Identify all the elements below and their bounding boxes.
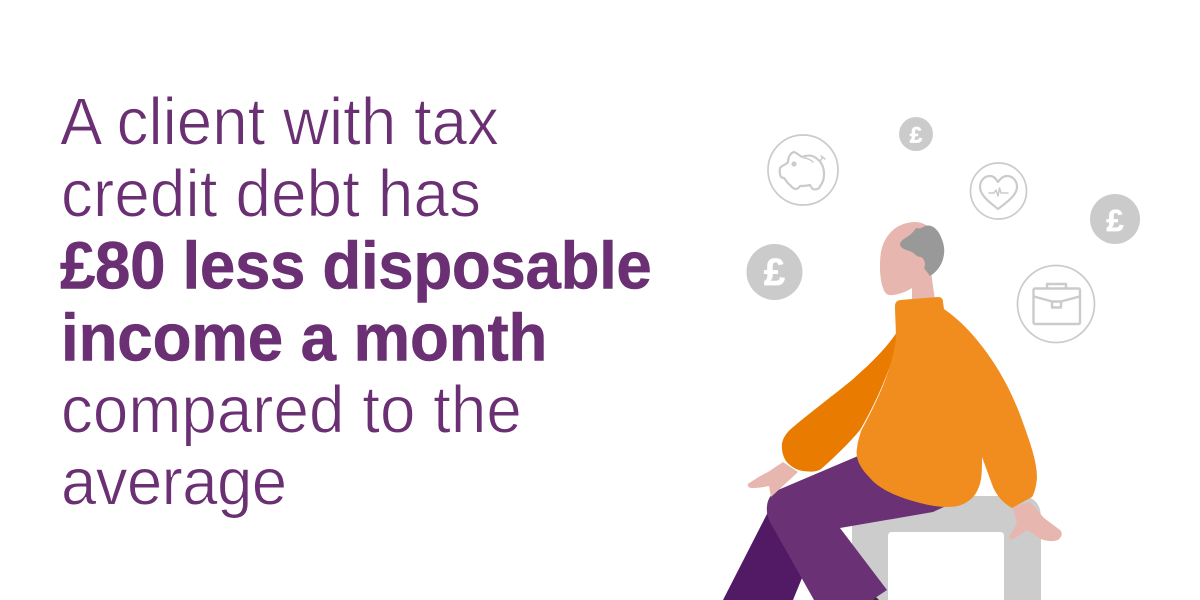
icon: pound coin large (746, 244, 802, 300)
headline text: compared to the (61, 372, 522, 447)
jumper body and arm (857, 297, 1037, 508)
icon: pound coin small (899, 117, 933, 151)
headline text: credit debt has (61, 156, 481, 231)
dark sleeve (782, 332, 897, 472)
icon: pound coin right (1090, 194, 1140, 244)
shoe hint (872, 597, 879, 600)
figure: seated man (723, 222, 1062, 600)
icon: pound coin large: £ (764, 252, 785, 294)
headline text: A client with tax (60, 84, 499, 159)
near leg (767, 456, 946, 600)
icon: pound coin right: £ (1106, 203, 1124, 238)
headline text: income a month (61, 300, 547, 375)
hair (900, 225, 944, 276)
far leg (723, 512, 802, 600)
left hand (748, 462, 798, 497)
icon: pound coin small: £ (910, 122, 923, 148)
stool (852, 496, 1041, 600)
icon: briefcase (1018, 266, 1094, 342)
headline text (60, 84, 652, 519)
headline text: average (61, 444, 287, 519)
headline text: £80 less disposable (60, 228, 652, 303)
icon: heart with pulse (970, 163, 1026, 219)
icon: piggy bank (768, 135, 838, 205)
right hand (1009, 502, 1062, 541)
head (880, 222, 935, 302)
